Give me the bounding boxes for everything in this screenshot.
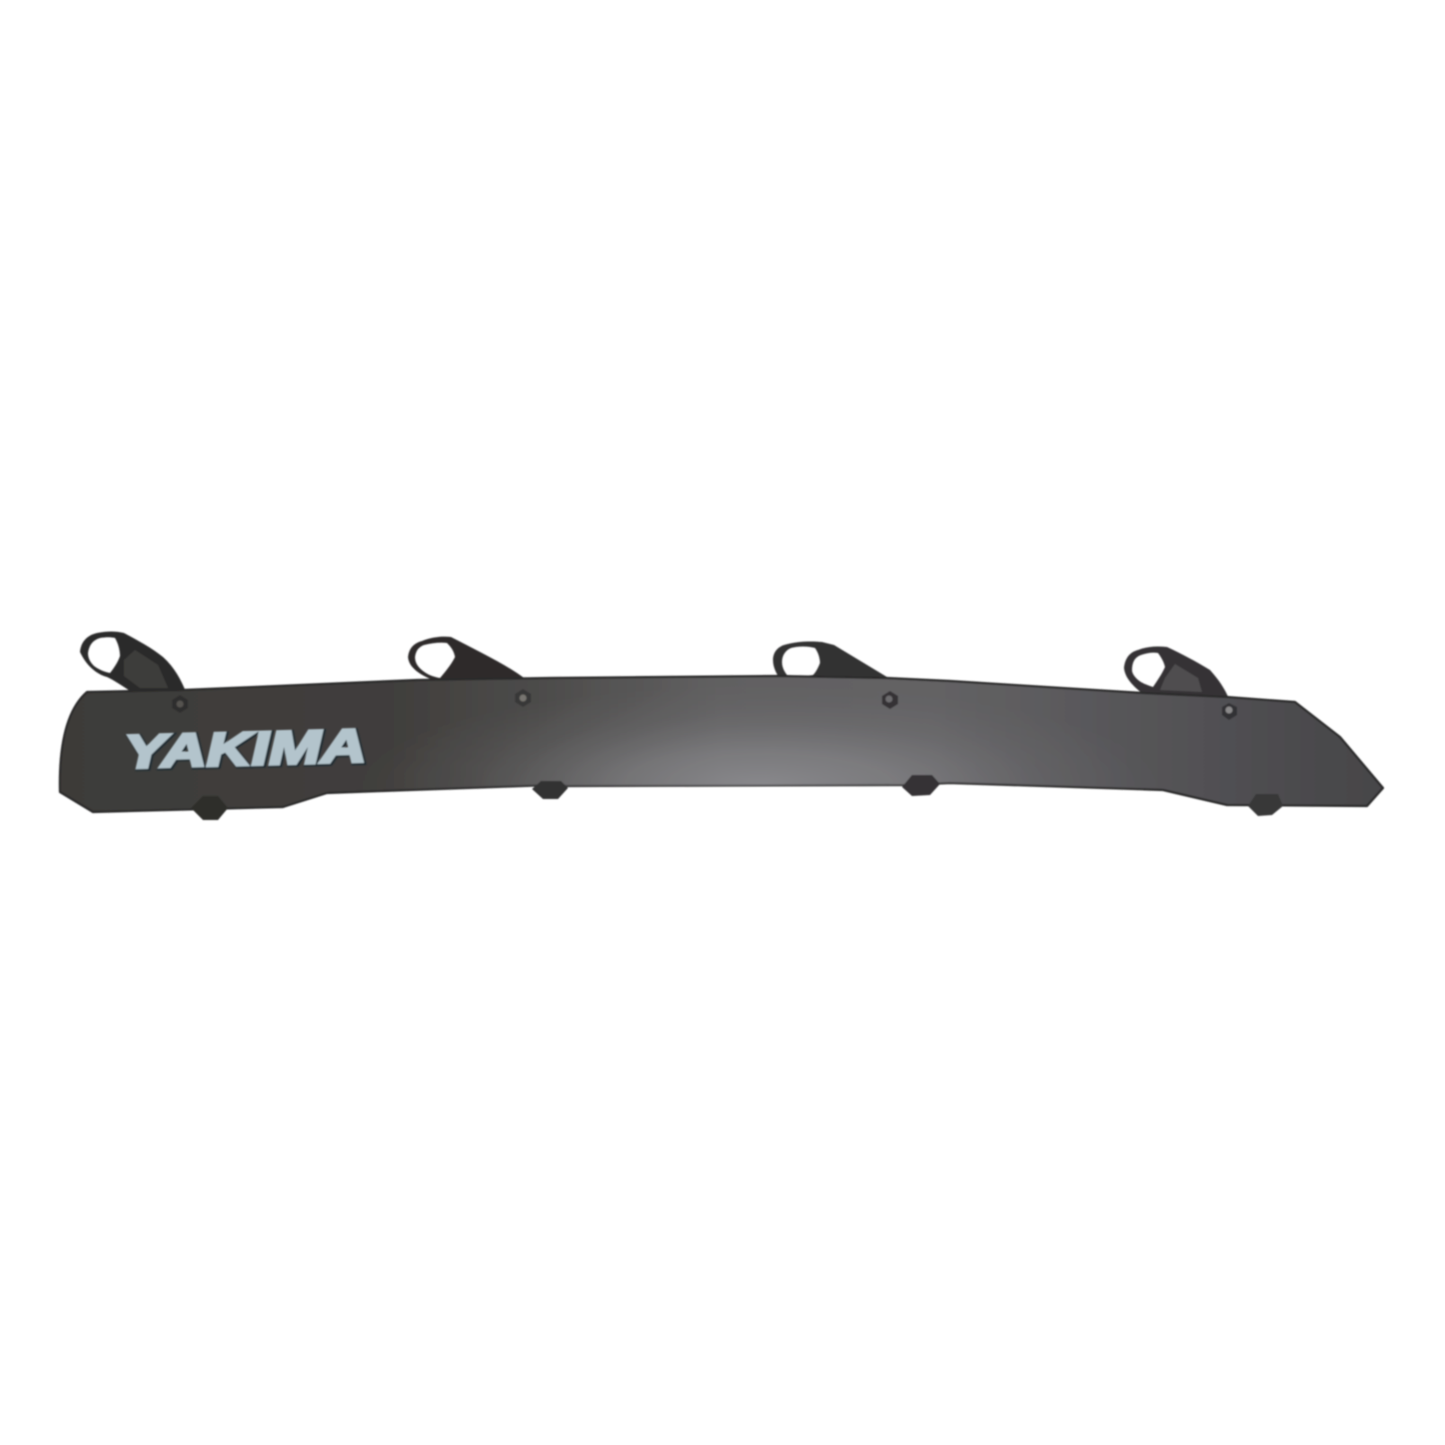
- logo: YAKIMA: YAKIMA: [124, 720, 368, 779]
- logo: YAKIMA: YAKIMA: [123, 719, 367, 778]
- bottom bracket 1: [191, 796, 228, 820]
- mounting clip 3: [773, 641, 887, 679]
- top bolt 2: [515, 689, 531, 707]
- clip 4 inner web: [1160, 664, 1202, 692]
- bottom bracket 4: [1248, 794, 1283, 816]
- fairing panel: [60, 676, 1383, 812]
- bottom bracket 2: [532, 781, 568, 799]
- top bolt 1: [172, 695, 188, 713]
- clip 1 inner web: [124, 650, 168, 688]
- top bolt 3: [882, 691, 898, 709]
- mounting clip 2: [408, 637, 530, 682]
- mounting clip 1: [80, 632, 186, 692]
- top bolt 4: [1222, 703, 1237, 720]
- bottom bracket 3: [902, 775, 940, 796]
- mounting clip 4: [1124, 646, 1229, 699]
